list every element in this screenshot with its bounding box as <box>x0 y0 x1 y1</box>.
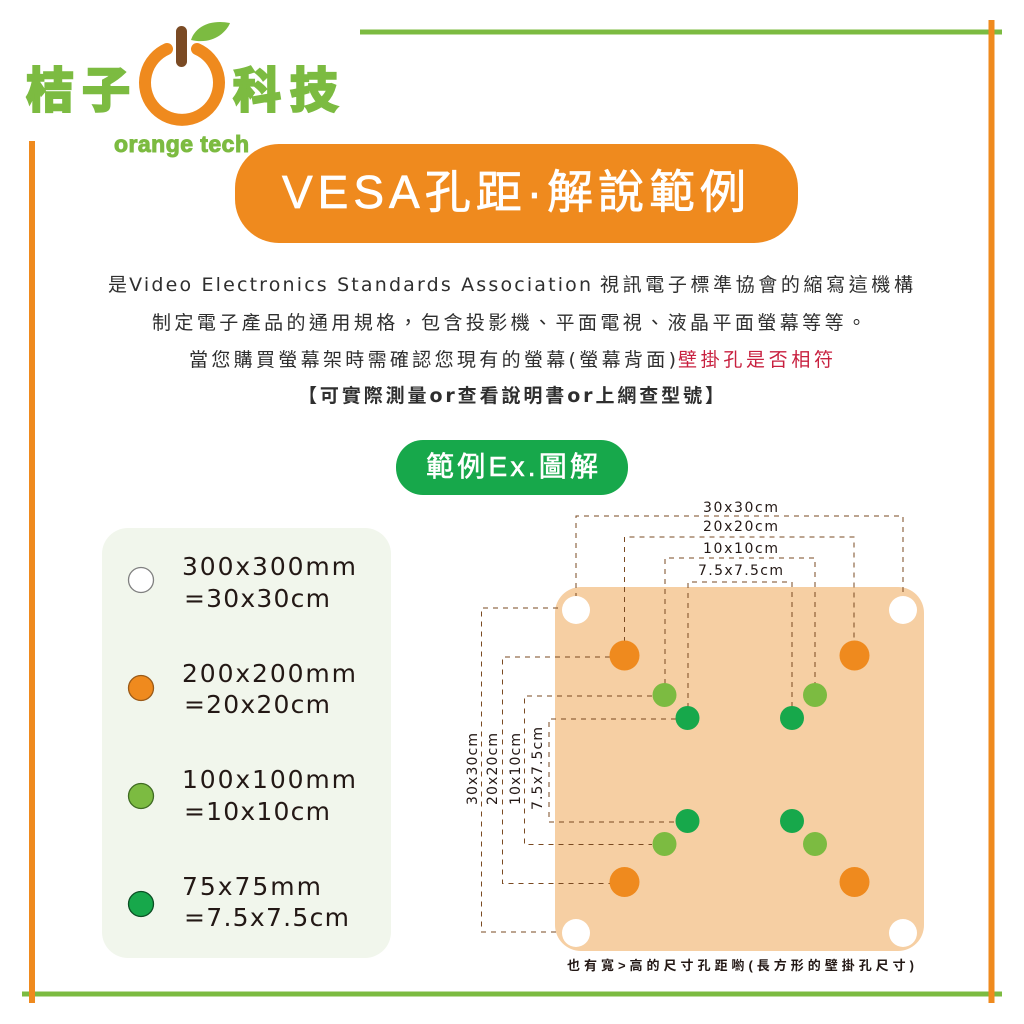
holes: 7.5x7.5cm <box>676 706 804 833</box>
side dimension labels: 7.5x7.5cm <box>530 727 546 810</box>
legend item: 100x100mm <box>128 765 356 826</box>
footnote: 也有寬>高的尺寸孔距喲(長方形的壁掛孔尺寸) <box>567 958 914 973</box>
logo text: 科技: 科技 <box>233 65 338 118</box>
title banner <box>235 144 798 243</box>
logo: orange tech <box>26 22 338 157</box>
intro line 1: 視訊電子標準協會的縮寫這機構 <box>600 274 913 296</box>
legend item: 75x75mm: =7.5x7.5cm <box>184 903 349 932</box>
logo tagline: orange tech <box>114 131 249 157</box>
holes: 30x30cm <box>562 596 917 947</box>
side dimension labels <box>465 727 546 810</box>
intro line 1 <box>108 274 913 296</box>
diagram: VESA hole pattern <box>465 500 924 973</box>
legend item: 100x100mm: =10x10cm <box>184 797 330 826</box>
top dimension labels: 7.5x7.5cm <box>698 563 783 579</box>
intro text block <box>108 274 913 407</box>
top dimension labels <box>698 500 783 579</box>
intro line 1: 是Video Electronics Standards Association <box>108 274 591 296</box>
logo text: 桔子: 桔子 <box>26 65 130 118</box>
icon: orange power ring <box>145 49 219 120</box>
icon: leaf <box>191 22 230 41</box>
holes: 20x20cm <box>610 640 870 897</box>
side dimension labels: 30x30cm <box>465 733 481 805</box>
intro line 4: 【可實際測量or查看說明書or上網查型號】 <box>298 384 724 407</box>
legend item: 200x200mm: =20x20cm <box>184 690 330 719</box>
top dimension labels: 30x30cm <box>703 500 778 516</box>
holes: 10x10cm <box>652 683 827 856</box>
legend item: 100x100mm: 100x100mm <box>182 765 356 794</box>
example badge label: 範例Ex.圖解 <box>426 451 598 482</box>
dashed dimension lines <box>482 516 903 932</box>
legend item: 75x75mm <box>128 872 349 932</box>
intro line 3: 壁掛孔是否相符 <box>678 349 833 371</box>
intro line 3: 當您購買螢幕架時需確認您現有的螢幕(螢幕背面) <box>189 349 676 371</box>
legend item: 200x200mm <box>128 659 356 719</box>
legend item: 75x75mm: 75x75mm <box>182 872 321 901</box>
icon: stem <box>176 26 187 67</box>
side dimension labels: 10x10cm <box>508 733 524 805</box>
side dimension labels: 20x20cm <box>485 733 501 805</box>
legend item: 300x300mm: =30x30cm <box>184 584 330 613</box>
panel: legend <box>102 528 391 958</box>
legend item: 200x200mm: 200x200mm <box>182 659 356 688</box>
legend item: 300x300mm <box>128 552 356 613</box>
example badge <box>396 440 628 495</box>
monitor back plate <box>555 587 924 951</box>
intro line 2: 制定電子產品的通用規格，包含投影機、平面電視、液晶平面螢幕等等。 <box>152 312 866 334</box>
top dimension labels: 20x20cm <box>703 519 778 535</box>
legend item: 300x300mm: 300x300mm <box>182 552 356 581</box>
top dimension labels: 10x10cm <box>703 541 778 557</box>
title: VESA孔距·解說範例 <box>282 166 746 218</box>
